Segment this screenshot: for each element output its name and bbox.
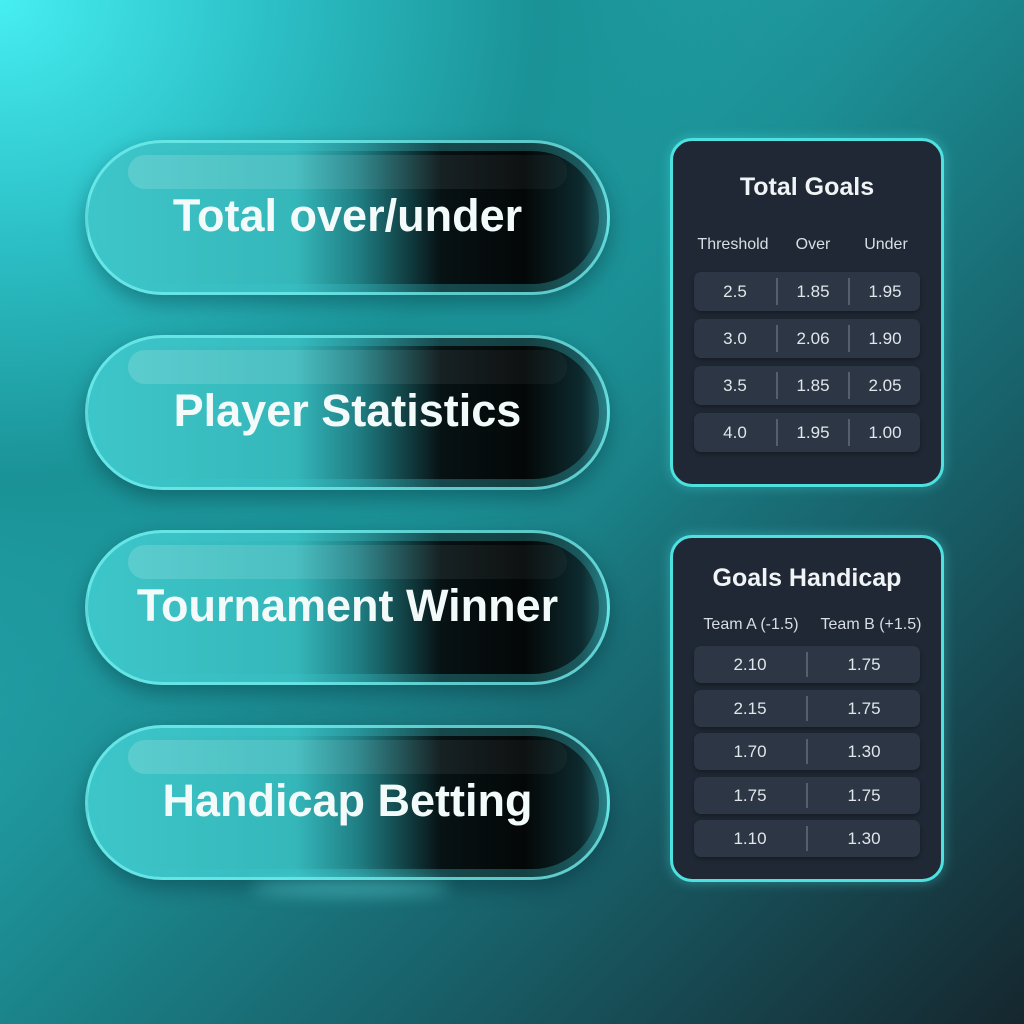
glow under pills: [250, 880, 450, 896]
table rows: 1.90: [868, 328, 902, 348]
pill: Tournament Winner: [85, 530, 610, 685]
pill: Player Statistics: [85, 335, 610, 490]
table rows: 2.06: [796, 328, 830, 348]
pill: Tournament Winner: Tournament Winner: [137, 580, 558, 630]
table rows: 1.85: [796, 376, 830, 394]
column headers: Threshold: [697, 236, 769, 253]
table rows: 2.05: [868, 376, 902, 394]
table rows: 1.00: [868, 422, 902, 442]
pill: Handicap Betting: [85, 725, 610, 880]
table rows: [694, 646, 920, 859]
pill: Handicap Betting: Handicap Betting: [162, 774, 533, 826]
table rows: 1.10: [733, 828, 767, 848]
panel: Total Goals: [670, 138, 944, 487]
table rows: 2.5: [723, 282, 747, 300]
column headers: [703, 616, 921, 633]
table rows: 3.5: [723, 376, 747, 394]
table rows: 1.75: [847, 654, 881, 674]
table rows: 1.70: [733, 742, 767, 760]
table rows: 2.15: [733, 698, 767, 718]
table rows: 3.0: [723, 328, 747, 348]
pill: Total over/under: [85, 140, 610, 295]
heading: Total Goals: Total Goals: [740, 173, 874, 201]
heading: Goals Handicap: Goals Handicap: [713, 564, 901, 592]
column headers: Under: [864, 236, 908, 253]
column headers: [697, 236, 908, 253]
pill: Total over/under: Total over/under: [173, 190, 522, 240]
table rows: 1.75: [847, 698, 881, 718]
table rows: [694, 272, 920, 454]
table rows: 1.95: [868, 282, 902, 300]
table rows: 1.30: [847, 742, 881, 760]
column headers: Team B (+1.5): [821, 616, 921, 633]
table rows: 1.95: [796, 422, 830, 442]
column headers: Team A (-1.5): [703, 616, 799, 633]
column headers: Over: [796, 236, 830, 253]
panel: Goals Handicap: [670, 535, 944, 882]
pill: Player Statistics: Player Statistics: [174, 384, 521, 436]
table rows: 1.30: [847, 828, 881, 848]
table rows: 1.85: [796, 282, 830, 300]
table rows: 1.75: [733, 786, 767, 804]
table rows: 4.0: [723, 422, 747, 442]
table rows: 2.10: [733, 654, 767, 674]
table rows: 1.75: [847, 786, 881, 804]
